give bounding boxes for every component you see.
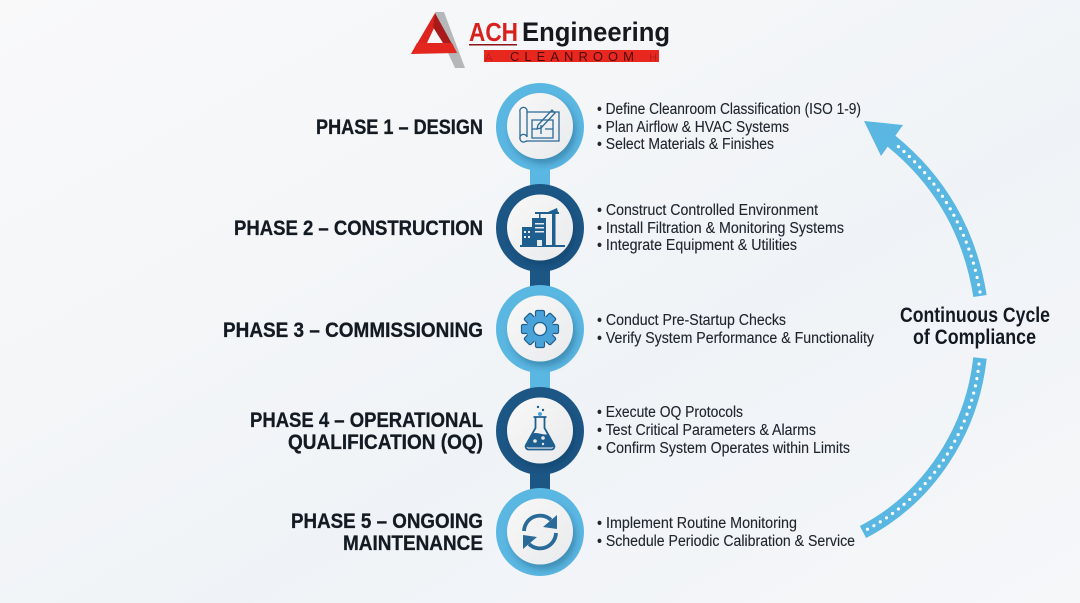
cycle arrow: upper with arrowhead (864, 121, 980, 296)
bullets: phase 4 (597, 404, 850, 457)
phase 2 (234, 184, 844, 272)
bullets: phase 3 (597, 312, 874, 347)
logo (411, 12, 670, 68)
logo banner: cleanroom: CLEANROOM (510, 49, 634, 64)
heading: phase 4: QUALIFICATION (OQ) (288, 431, 483, 454)
bullets: phase 5: • Implement Routine Monitoring (597, 515, 797, 532)
node: phase 1 blueprint icon (496, 83, 584, 171)
cycle label: of Compliance (913, 326, 1036, 349)
heading: phase 5 (291, 510, 483, 555)
bullets: phase 1 (597, 101, 861, 153)
logo mark (411, 12, 465, 68)
bullets: phase 4: • Confirm System Operates within Limits (597, 440, 850, 457)
logo banner: cleanroom: H (649, 52, 657, 64)
node: phase 5 refresh icon (496, 488, 584, 576)
heading: phase 5: MAINTENANCE (343, 532, 483, 555)
heading: phase 5: PHASE 5 – ONGOING (291, 510, 483, 533)
phase 3 (223, 285, 874, 373)
cycle label (900, 304, 1050, 349)
phase 5 (291, 488, 855, 576)
bullets: phase 2: • Construct Controlled Environment (597, 202, 819, 219)
heading: phase 4: PHASE 4 – OPERATIONAL (250, 409, 483, 432)
node: phase 3 gear icon (496, 285, 584, 373)
cycle label: Continuous Cycle (900, 304, 1050, 327)
timeline: vertical connectors (530, 165, 550, 498)
bullets: phase 4: • Test Critical Parameters & Alarms (597, 422, 816, 439)
bullets: phase 1: • Plan Airflow & HVAC Systems (597, 119, 789, 136)
bullets: phase 5: • Schedule Periodic Calibration & Service (597, 533, 855, 550)
bullets: phase 3: • Verify System Performance & Functionality (597, 330, 874, 347)
bullets: phase 2: • Install Filtration & Monitoring Systems (597, 220, 844, 237)
cycle arrow: lower (863, 358, 980, 532)
logo text: ACH Engineering: Engineering (522, 17, 670, 47)
heading: phase 2: PHASE 2 – CONSTRUCTION (234, 217, 483, 240)
bullets: phase 2: • Integrate Equipment & Utilities (597, 237, 797, 254)
heading: phase 4 (250, 409, 483, 454)
logo text: ACH Engineering: ACH (469, 17, 518, 47)
phase 4 (250, 387, 850, 475)
heading: phase 1: PHASE 1 – DESIGN (316, 116, 483, 139)
bullets: phase 1: • Select Materials & Finishes (597, 136, 774, 153)
node: phase 4 flask icon (496, 387, 584, 475)
phase 1 (316, 83, 861, 171)
bullets: phase 4: • Execute OQ Protocols (597, 404, 743, 421)
bullets: phase 5 (597, 515, 855, 550)
bullets: phase 1: • Define Cleanroom Classification (ISO 1-9) (597, 101, 861, 118)
logo banner: cleanroom: A (485, 52, 493, 64)
node: phase 2 building icon (496, 184, 584, 272)
bullets: phase 3: • Conduct Pre-Startup Checks (597, 312, 786, 329)
bullets: phase 2 (597, 202, 844, 254)
heading: phase 3: PHASE 3 – COMMISSIONING (223, 319, 483, 342)
